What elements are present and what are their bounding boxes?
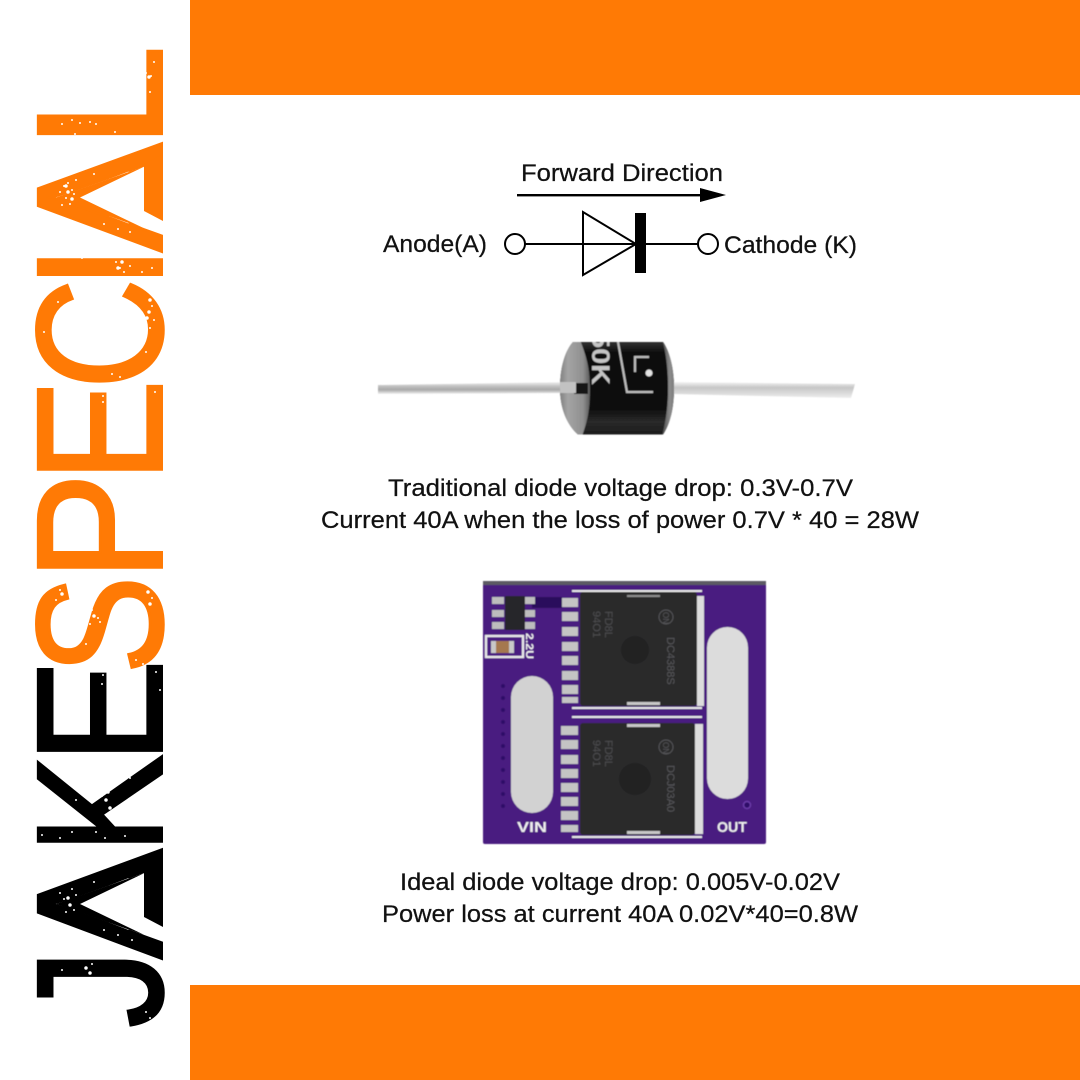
label: Cathode (K): Cathode (K)	[724, 232, 857, 259]
voltage drop line: Ideal diode voltage drop: 0.005V-0.02V	[400, 869, 841, 896]
silk label 2.2U: 2.2U	[523, 633, 535, 659]
bottom orange band	[190, 985, 1080, 1080]
MOSFET bottom: DCJ03A0	[664, 765, 676, 812]
power loss line: Power loss at current 40A 0.02V*40=0.8W	[382, 901, 859, 928]
word: SPECIAL in orange: P	[1, 473, 200, 581]
word: SPECIAL in orange: A	[0, 143, 200, 252]
word: JAKE in black: A	[1, 849, 200, 959]
driver chip	[492, 596, 562, 630]
label: Forward Direction: Forward Direction	[521, 160, 723, 187]
photo: ideal diode purple circuit board	[483, 581, 766, 844]
word: SPECIAL in orange: E	[1, 380, 200, 482]
MOSFET top: 94O1	[590, 611, 602, 638]
distressed texture specks	[42, 62, 160, 1018]
word: SPECIAL in orange: L	[0, 45, 200, 149]
diode marking: 50K	[586, 332, 614, 385]
MOSFET top: FD8L	[602, 611, 614, 638]
word: SPECIAL in orange	[0, 45, 200, 674]
photo: traditional axial diode	[378, 332, 855, 436]
word: JAKE in black: J	[0, 949, 200, 1028]
MOSFET bottom: FD8L	[602, 740, 614, 767]
word: SPECIAL in orange: S	[0, 576, 200, 674]
diode schematic symbol	[383, 160, 857, 275]
word: SPECIAL in orange: C	[0, 278, 200, 389]
via column	[501, 686, 505, 806]
board	[483, 582, 766, 844]
word: JAKE in black	[0, 660, 200, 1028]
label: Anode(A): Anode(A)	[383, 231, 487, 258]
capacitor with silk outline	[486, 636, 523, 657]
word: JAKE in black: K	[0, 755, 200, 854]
word: SPECIAL in orange: I	[1, 245, 200, 290]
MOSFET bottom: ON	[661, 742, 670, 754]
MOSFET bottom: 94O1	[590, 740, 602, 767]
mounting via	[744, 802, 750, 808]
arrow: forward direction	[517, 188, 726, 202]
OUT pad	[707, 627, 748, 799]
vertical wordmark: JAKESPECIAL	[0, 45, 200, 1028]
right lead	[672, 382, 855, 398]
MOSFET top: DC4388S	[664, 637, 676, 685]
voltage drop line: Traditional diode voltage drop: 0.3V-0.7V	[388, 475, 854, 502]
top orange band	[190, 0, 1080, 95]
diode body	[559, 341, 675, 436]
word: JAKE in black: E	[0, 660, 200, 763]
caption: ideal diode	[382, 869, 859, 928]
caption: traditional diode	[321, 475, 920, 534]
VIN pad	[511, 676, 553, 813]
silk label OUT: OUT	[717, 819, 747, 836]
MOSFET bottom	[561, 716, 703, 838]
power loss line: Current 40A when the loss of power 0.7V * 40 = 28W	[321, 507, 920, 534]
MOSFET top	[562, 590, 704, 709]
diode symbol with terminals	[505, 212, 718, 275]
left lead	[378, 382, 572, 394]
MOSFET top: ON	[661, 612, 670, 624]
silk label VIN: VIN	[517, 819, 547, 836]
